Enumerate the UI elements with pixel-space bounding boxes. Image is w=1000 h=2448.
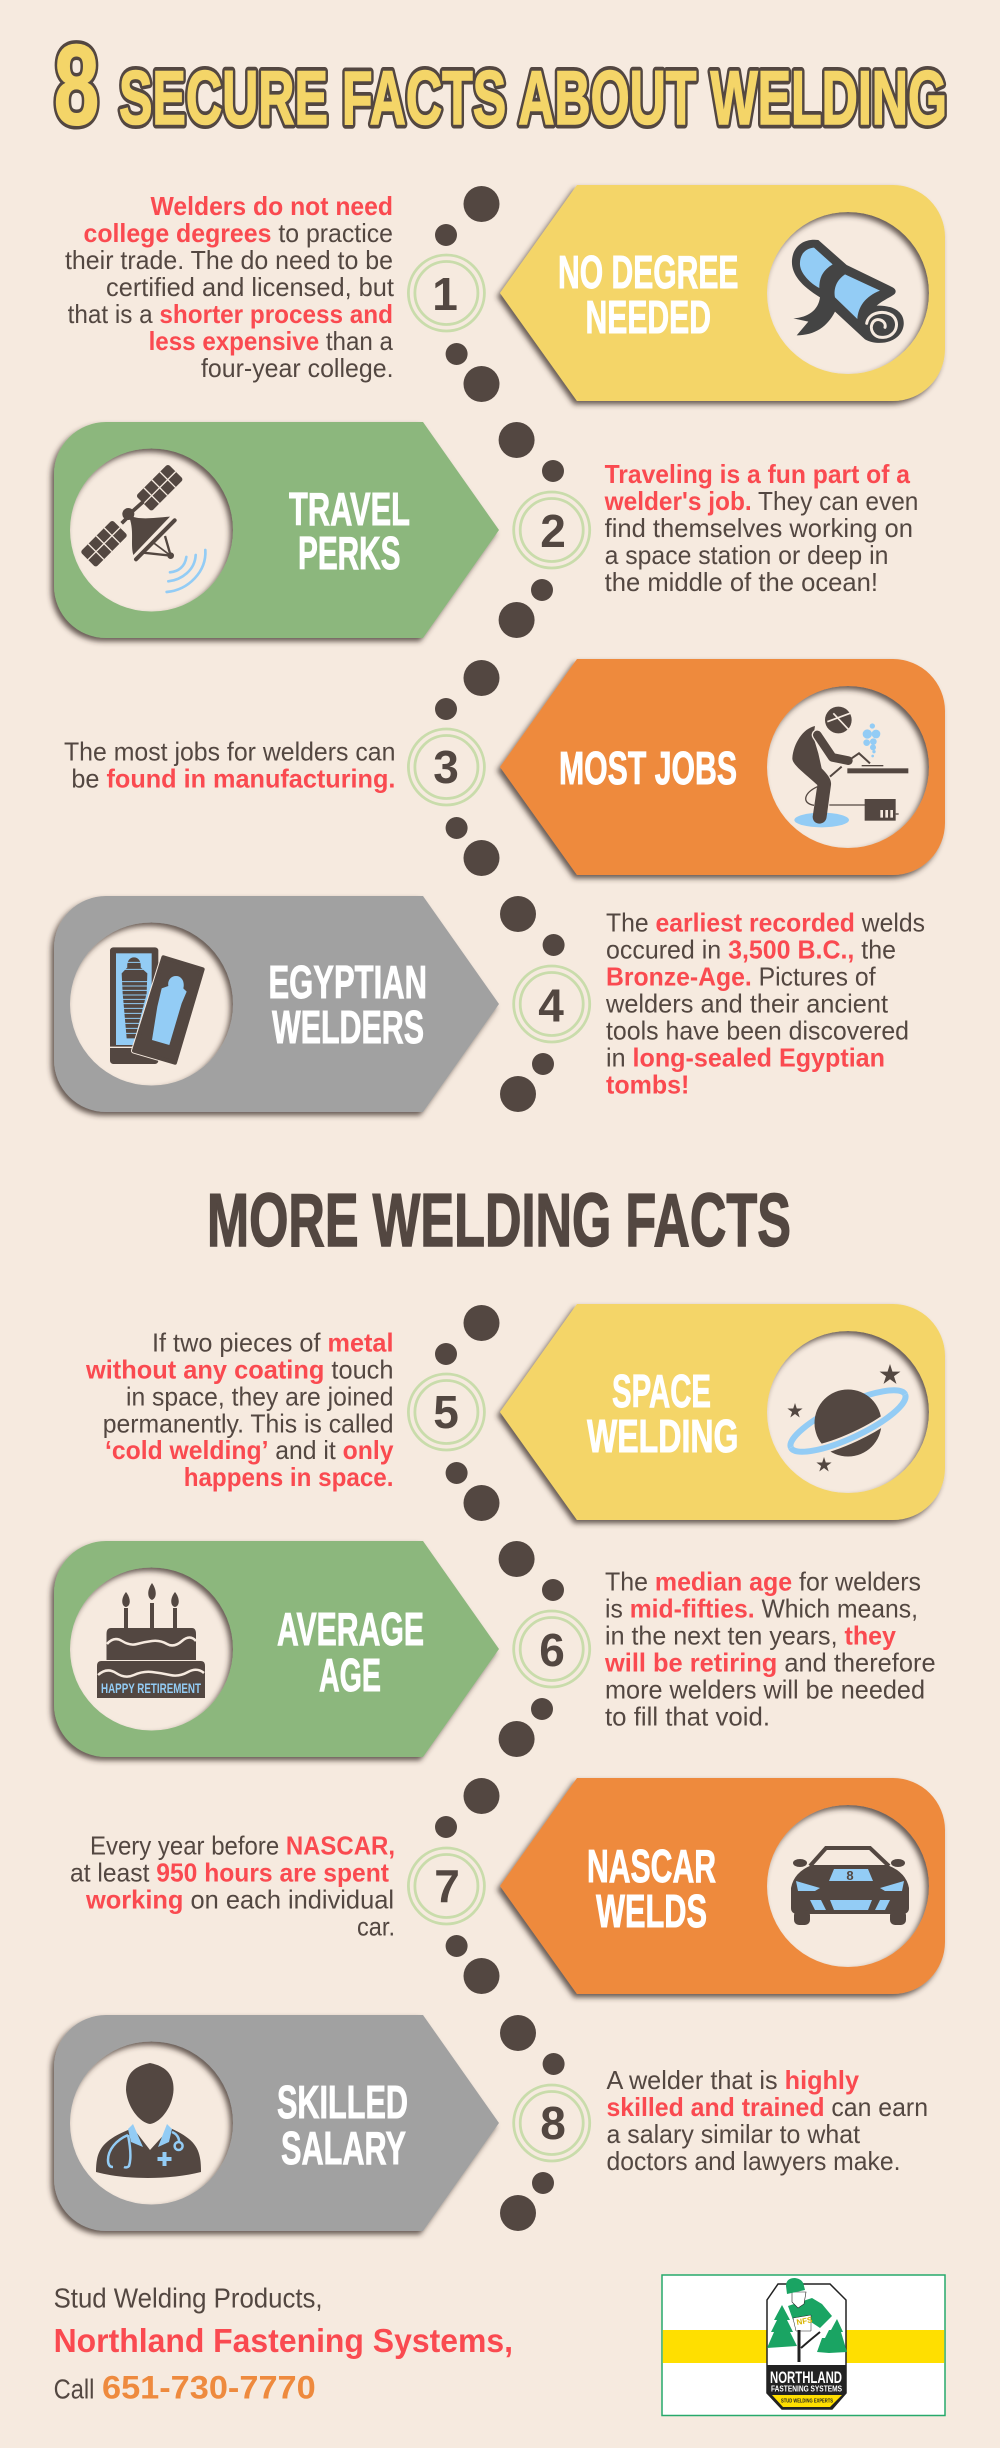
icon: egyptian sarcophagus — [110, 947, 203, 1064]
fact text: Bronze-Age. Pictures of — [606, 962, 876, 992]
fact text: permanently. This is called — [103, 1408, 393, 1438]
number badge 3 — [408, 729, 484, 805]
number badge 6: 6 — [539, 1624, 565, 1676]
fact text: ‘cold welding’ and it only — [105, 1435, 394, 1465]
fact text: that is a shorter process and — [68, 299, 393, 329]
icon: race car: 8 — [846, 1868, 854, 1883]
fact text: in long-sealed Egyptian — [606, 1043, 885, 1073]
number badge 8: 8 — [540, 2097, 566, 2149]
card label — [587, 1365, 738, 1462]
card: space welding — [500, 1304, 945, 1520]
icon: satellite — [80, 464, 205, 592]
icon: welder at work — [792, 707, 908, 827]
card label: WELDERS — [272, 1001, 424, 1053]
logo: northland fastening systems — [662, 2275, 945, 2416]
panel: fact 8 — [54, 2015, 928, 2231]
connector dots — [435, 186, 500, 402]
fact text: The most jobs for welders can — [64, 737, 395, 767]
fact text — [606, 2065, 928, 2176]
number badge 5: 5 — [433, 1386, 459, 1438]
card label: NASCAR — [587, 1840, 716, 1892]
footer contact text — [54, 2283, 513, 2405]
card label — [277, 2076, 408, 2174]
logo: northland fastening systems: FASTENING SYSTEMS — [771, 2384, 842, 2394]
card: skilled salary — [54, 2015, 499, 2231]
fact text: more welders will be needed — [605, 1674, 925, 1704]
title — [54, 22, 947, 148]
number badge 1 — [408, 255, 484, 331]
fact text — [604, 1566, 936, 1732]
fact text: Traveling is a fun part of a — [605, 459, 911, 489]
card label: WELDS — [596, 1885, 707, 1937]
footer contact text: 651-730-7770 — [102, 2369, 316, 2405]
card: no degree needed — [500, 185, 945, 401]
number badge 8 — [514, 2085, 590, 2161]
panel: fact 4 — [54, 896, 925, 1112]
fact text: tools have been discovered — [606, 1016, 909, 1046]
number badge 6 — [514, 1611, 590, 1687]
fact text: without any coating touch — [85, 1354, 393, 1384]
fact text: in space, they are joined — [126, 1381, 394, 1411]
card label: WELDING — [587, 1410, 738, 1462]
number badge 7: 7 — [434, 1860, 460, 1912]
footer contact text: Call — [54, 2373, 94, 2404]
card label: PERKS — [298, 527, 400, 579]
icon: retirement cake: HAPPY RETIREMENT — [101, 1680, 201, 1696]
fact text: a salary similar to what — [606, 2119, 861, 2149]
footer contact text: Stud Welding Products, — [54, 2283, 323, 2314]
number badge 2 — [514, 492, 590, 568]
fact text: four-year college. — [201, 353, 394, 383]
number badge 1: 1 — [432, 268, 458, 320]
connector dots — [435, 660, 500, 876]
fact text: The median age for welders — [605, 1566, 921, 1596]
number badge 7 — [408, 1848, 484, 1924]
card label: NO DEGREE — [558, 246, 738, 298]
panel: fact 5 — [85, 1304, 945, 1521]
fact text: Welders do not need — [150, 191, 393, 221]
icon: ringed planet — [784, 1364, 912, 1471]
fact text — [85, 1328, 394, 1492]
card label: EGYPTIAN — [268, 956, 427, 1008]
fact text: a space station or deep in — [605, 540, 888, 570]
icon: retirement cake — [97, 1583, 205, 1698]
card label — [289, 483, 410, 579]
fact text: college degrees to practice — [84, 218, 393, 248]
card label: SPACE — [612, 1365, 711, 1417]
fact text — [70, 1830, 395, 1942]
panel: fact 3 — [64, 659, 945, 876]
number badge 4 — [514, 966, 590, 1042]
fact text — [604, 459, 918, 597]
fact text: their trade. The do need to be — [65, 245, 393, 275]
icon: diploma scroll — [792, 240, 904, 343]
card label: AVERAGE — [277, 1603, 424, 1655]
card label: MOST JOBS — [559, 742, 737, 794]
panel: fact 1 — [65, 185, 945, 402]
fact text: less expensive than a — [149, 326, 393, 356]
logo: northland fastening systems: NORTHLAND — [770, 2368, 842, 2387]
fact text: car. — [357, 1912, 395, 1942]
fact text: at least 950 hours are spent — [70, 1858, 389, 1888]
fact text: welder's job. They can even — [604, 486, 918, 516]
connector dots — [435, 1778, 500, 1994]
fact text — [605, 908, 925, 1100]
fact text: Every year before NASCAR, — [90, 1830, 395, 1860]
card label — [277, 1603, 424, 1701]
fact text: welders and their ancient — [605, 989, 889, 1019]
number badge 5 — [408, 1374, 484, 1450]
fact text: occured in 3,500 B.C., the — [606, 935, 896, 965]
card label — [558, 246, 738, 343]
connector dots — [500, 896, 565, 1112]
fact text: The earliest recorded welds — [606, 908, 925, 938]
footer contact text: Northland Fastening Systems, — [54, 2322, 513, 2359]
fact text: happens in space. — [184, 1462, 394, 1492]
card: most jobs — [500, 659, 945, 875]
number badge 3: 3 — [433, 741, 459, 793]
card: nascar welds — [500, 1778, 945, 1994]
fact text: doctors and lawyers make. — [606, 2146, 900, 2176]
fact text: in the next ten years, they — [605, 1620, 897, 1650]
fact text: skilled and trained can earn — [606, 2092, 928, 2122]
panel: fact 7 — [70, 1778, 945, 1994]
fact text: find themselves working on — [605, 513, 913, 543]
fact text: be found in manufacturing. — [71, 764, 395, 794]
card: travel perks — [54, 422, 499, 638]
card: average age — [54, 1541, 499, 1757]
number badge 2: 2 — [540, 505, 566, 557]
icon: race car — [791, 1848, 909, 1925]
panel: fact 2 — [54, 422, 918, 638]
card label: SKILLED — [277, 2076, 408, 2128]
connector dots — [499, 1541, 564, 1757]
fact text — [64, 737, 395, 794]
card label: TRAVEL — [289, 483, 410, 535]
fact text — [65, 191, 395, 383]
fact text: tombs! — [606, 1070, 689, 1100]
fact text: working on each individual — [85, 1885, 394, 1915]
fact text: to fill that void. — [605, 1702, 770, 1732]
card label — [587, 1840, 716, 1937]
fact text: is mid-fifties. Which means, — [605, 1594, 918, 1624]
number badge 4: 4 — [538, 980, 564, 1032]
logo: northland fastening systems: NFS — [796, 2315, 814, 2327]
card label — [268, 956, 427, 1053]
card: egyptian welders — [54, 896, 499, 1112]
icon: doctor — [96, 2063, 201, 2178]
card label: AGE — [319, 1649, 381, 1701]
fact text: If two pieces of metal — [152, 1328, 394, 1358]
connector dots — [435, 1305, 500, 1521]
card label: SALARY — [281, 2122, 406, 2174]
fact text: certified and licensed, but — [106, 272, 395, 302]
connector dots — [500, 2015, 565, 2231]
title: 8 — [54, 22, 99, 148]
panel: fact 6 — [54, 1541, 936, 1757]
fact text: the middle of the ocean! — [605, 567, 878, 597]
title: 8 — [54, 22, 99, 148]
card label: NEEDED — [586, 291, 711, 343]
connector dots — [499, 422, 564, 638]
fact text: will be retiring and therefore — [604, 1648, 936, 1678]
fact text: A welder that is highly — [606, 2065, 860, 2095]
logo: northland fastening systems: STUD WELDING EXPERTS — [781, 2399, 833, 2405]
